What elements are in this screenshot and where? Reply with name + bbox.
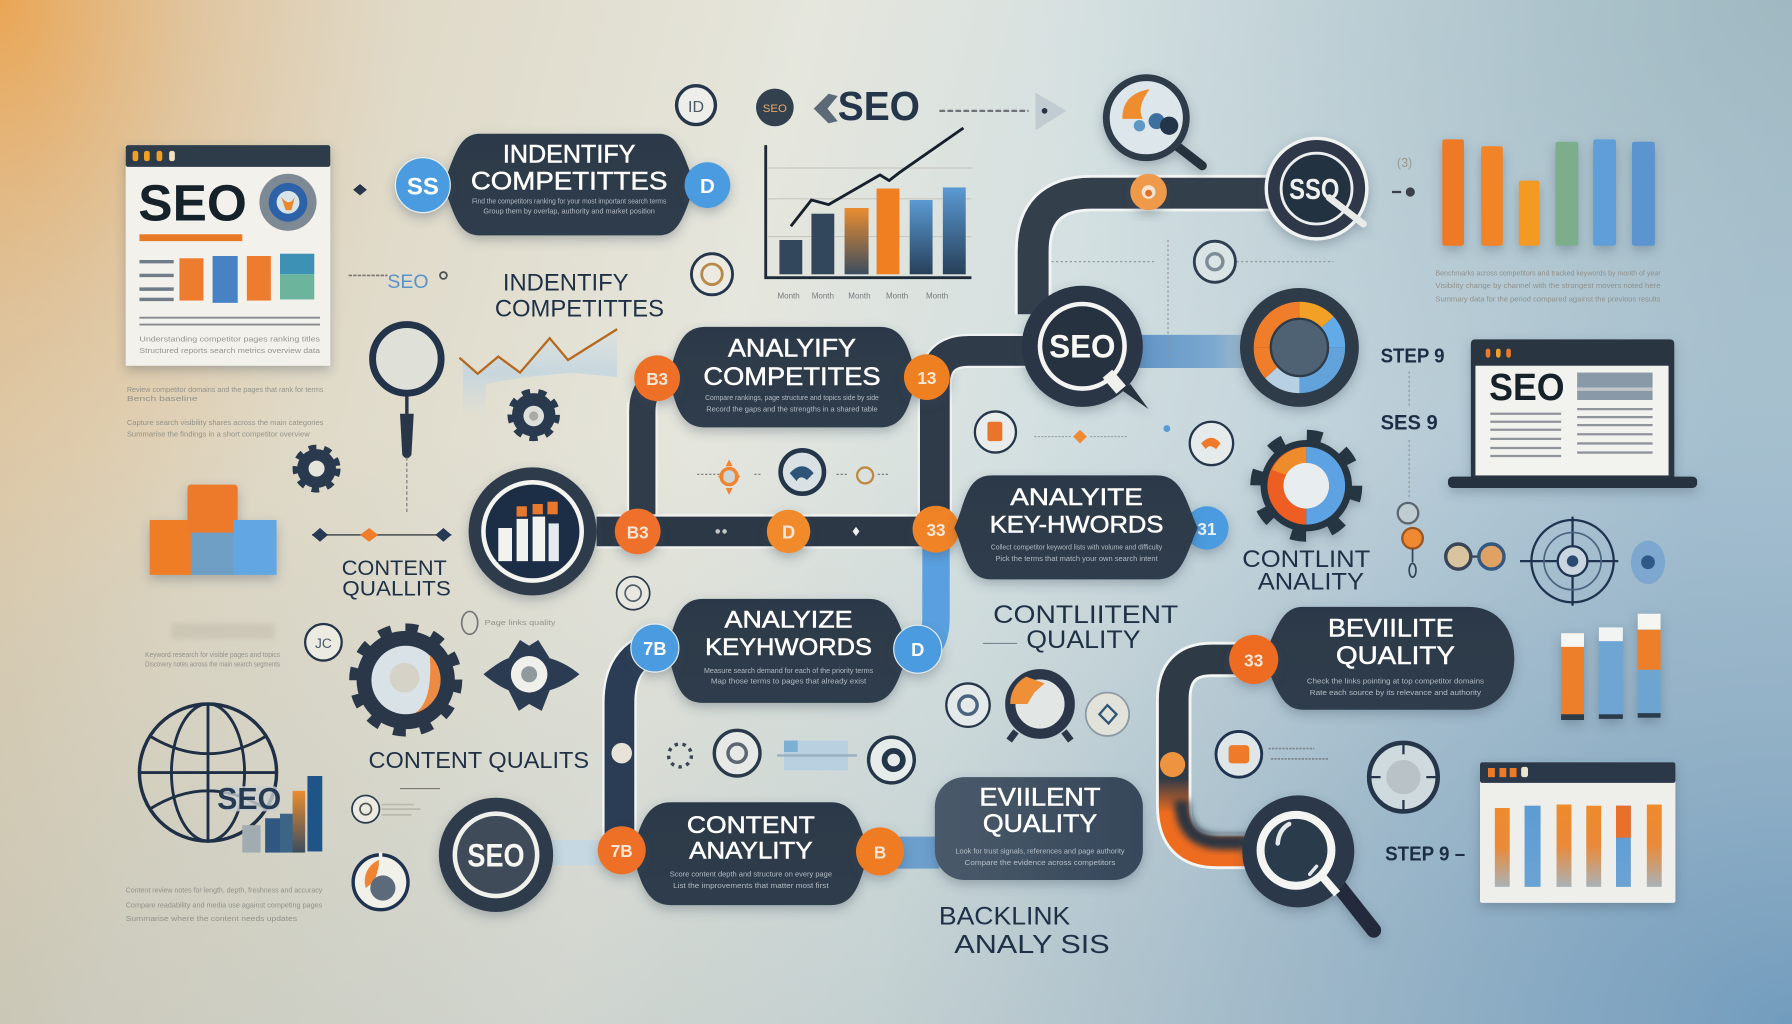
pill: analyze keywords 2: ANALYIZE xyxy=(725,606,853,633)
gear icon xyxy=(296,448,337,489)
target icons xyxy=(1446,517,1665,606)
pill: content analysis: ANAYLITY xyxy=(689,837,813,864)
pill: content analysis: CONTENT xyxy=(687,812,815,839)
label: SEO small xyxy=(349,271,447,293)
pill: evident quality xyxy=(935,777,1143,880)
bar and line chart xyxy=(766,128,971,300)
right caption text: Visibility change by channel with the strongest movers noted here xyxy=(1435,281,1661,290)
right caption text: Benchmarks across competitors and tracked keywords by month of year xyxy=(1435,268,1661,277)
pendant icon xyxy=(1398,503,1423,577)
small icons under donut xyxy=(975,411,1233,465)
web page mockup card: Understanding competitor pages ranking titles xyxy=(139,335,320,344)
pill: analyze keywords 2 xyxy=(666,599,909,703)
blue band between SEO circle and donut xyxy=(1131,335,1248,368)
step badges on main track: D xyxy=(782,521,795,542)
small link and line: Page links quality xyxy=(485,618,556,627)
backlink small icons xyxy=(1216,731,1438,811)
label: identify competitors xyxy=(495,269,664,323)
small link and line xyxy=(462,611,556,634)
circle icon: bars xyxy=(469,467,597,595)
label: content analysis right xyxy=(1242,546,1371,596)
circle icon: SEO bottom: SEO xyxy=(467,837,525,873)
pill: analyze keywords 2: KEYHWORDS xyxy=(705,634,872,661)
SEO circle top right: SSQ xyxy=(1289,174,1339,206)
pill: identify competitors: INDENTIFY xyxy=(503,140,636,168)
connector dot xyxy=(353,184,367,195)
left caption text 3: Summarise where the content needs updates xyxy=(126,914,297,923)
step badges: analyze competitors: 13 xyxy=(917,368,936,388)
timeline line xyxy=(312,528,451,542)
gauge icons row xyxy=(946,674,1129,741)
left caption text 1: Review competitor domains and the pages that rank for terms xyxy=(127,385,324,394)
pill: analyze competitors xyxy=(669,327,917,427)
step badges: analyze keywords xyxy=(631,624,942,673)
label: SEO small: SEO xyxy=(387,271,429,293)
large magnifier xyxy=(1242,795,1374,930)
label: step 9 bottom: STEP 9 – xyxy=(1385,843,1465,866)
bar and line chart: Month xyxy=(812,291,834,300)
step badges on main track: 33 xyxy=(926,520,946,540)
connector paths xyxy=(549,193,1274,853)
left caption text 1: Capture search visibility shares across the main categories xyxy=(127,418,324,427)
ring icon xyxy=(617,577,650,610)
track node backlink xyxy=(1160,752,1185,777)
pill: backlink quality: Rate each source by its relevance and authority xyxy=(1310,688,1481,697)
globe with chart xyxy=(139,704,322,853)
blurred keyword block: Discovery notes across the main search segments xyxy=(145,659,280,668)
label: identify competitors: COMPETITTES xyxy=(495,296,664,323)
SEO circle top right xyxy=(1266,138,1367,239)
step badges: analyze competitors xyxy=(634,354,950,401)
pill: analyze keywords 1: Pick the terms that match your own search intent xyxy=(995,554,1158,563)
pill: backlink quality: Check the links pointing at top competitor domains xyxy=(1307,676,1484,685)
pill: evident quality: QUALITY xyxy=(983,810,1097,838)
small marks on track xyxy=(715,527,859,536)
small icons by SEO heading: SEO xyxy=(763,103,787,115)
blocks xyxy=(150,485,277,575)
pill: analyze keywords 1: ANALYITE xyxy=(1010,484,1143,511)
step badges: content xyxy=(598,826,904,875)
small icons by SEO heading xyxy=(677,86,794,126)
label: identify competitors: INDENTIFY xyxy=(503,269,629,296)
pill: content analysis xyxy=(632,802,869,905)
color gear xyxy=(1257,437,1355,535)
labels: steps xyxy=(1381,344,1445,497)
right top bar chart xyxy=(1442,139,1655,246)
step badges on main track: B3 xyxy=(627,522,649,542)
pill: identify competitors xyxy=(443,134,695,235)
bar and line chart: Month xyxy=(777,291,800,300)
step badge: backlink xyxy=(1229,635,1278,684)
pill: analyze competitors: COMPETITES xyxy=(703,363,881,391)
step badges on main track xyxy=(615,506,1229,554)
step badges: content: 7B xyxy=(611,841,633,861)
arrow xyxy=(939,93,1066,130)
bar and line chart: Month xyxy=(848,291,871,300)
label: content analysis right: CONTLINT xyxy=(1242,546,1371,573)
second gear xyxy=(483,640,579,711)
label: content quality center xyxy=(983,601,1178,654)
pill: analyze keywords 2: Map those terms to pages that already exist xyxy=(711,676,866,685)
ring icon xyxy=(691,254,733,295)
eye icon xyxy=(1392,156,1415,197)
label: content analysis right: ANALITY xyxy=(1258,569,1364,596)
pill: content analysis: List the improvements that matter most first xyxy=(673,881,829,890)
bar and line chart: Month xyxy=(886,291,908,300)
step badges: identify: SS xyxy=(407,173,439,200)
labels: steps: STEP 9 xyxy=(1381,344,1445,367)
right small bar chart xyxy=(1561,614,1661,720)
label: backlink analysis: BACKLINK xyxy=(939,903,1071,931)
labels: steps: SES 9 xyxy=(1381,410,1438,435)
step badges: content: B xyxy=(874,842,886,862)
web page mockup card: SEO xyxy=(138,174,247,232)
donut chart xyxy=(1240,288,1359,407)
magnifier with handle xyxy=(373,325,441,512)
label: content quality center: QUALITY xyxy=(1026,626,1141,654)
large gear xyxy=(354,629,457,731)
label: content quality xyxy=(342,555,451,600)
dotted guide lines xyxy=(1051,240,1334,357)
left caption text 1: Bench baseline xyxy=(127,394,198,403)
pill: identify competitors: COMPETITTES xyxy=(471,168,667,196)
bar and line chart: Month xyxy=(926,291,948,300)
label: content quality single line: CONTENT QUALITS xyxy=(369,747,589,773)
node on left track xyxy=(611,743,632,763)
pill: content analysis: Score content depth and structure on every page xyxy=(670,870,832,879)
pill: analyze keywords 1: Collect competitor keyword lists with volume and difficulty xyxy=(991,543,1163,552)
label: content quality center: CONTLIITENT xyxy=(993,601,1178,629)
pill: identify competitors: Group them by overlap, authority and market position xyxy=(483,207,655,216)
label: backlink analysis xyxy=(939,903,1110,959)
right caption text xyxy=(1435,268,1661,304)
step badge: backlink: 33 xyxy=(1244,650,1263,670)
small gauge icon xyxy=(353,789,440,910)
pill: analyze keywords 1: KEY-HWORDS xyxy=(990,512,1163,539)
icon row under keywords xyxy=(669,730,914,783)
pill: analyze competitors: Compare rankings, page structure and topics side by side xyxy=(705,393,879,402)
mini icon row xyxy=(697,450,889,495)
circle icon: SEO bottom xyxy=(439,798,553,912)
gear icon xyxy=(511,392,557,438)
pill: backlink quality xyxy=(1263,607,1514,710)
pill: analyze keywords 1 xyxy=(954,475,1198,579)
circle icon: SEO magnifier xyxy=(1022,286,1149,409)
globe with chart: SEO xyxy=(217,781,281,816)
label: content quality: CONTENT xyxy=(342,555,447,580)
track node top xyxy=(1130,174,1167,210)
step badges: identify: D xyxy=(700,175,715,198)
left caption text 1 xyxy=(127,385,324,439)
laptop with SEO page: SEO xyxy=(1489,366,1565,408)
magnifier top xyxy=(1106,78,1202,166)
eye icon: (3) xyxy=(1397,156,1412,170)
icon: small ring: JC xyxy=(315,636,332,651)
pill: analyze competitors: ANALYIFY xyxy=(728,335,856,363)
right caption text: Summary data for the period compared against the previous results xyxy=(1435,295,1661,304)
left caption text 3: Content review notes for length, depth, freshness and accuracy xyxy=(126,886,323,895)
blurred keyword block xyxy=(145,623,280,668)
web page mockup card xyxy=(126,145,330,366)
small icon with line xyxy=(352,795,421,823)
step badges on main track: 31 xyxy=(1197,519,1217,539)
window chart bottom right xyxy=(1480,762,1675,903)
circle icon: SEO magnifier: SEO xyxy=(1049,329,1115,365)
pill: identify competitors: Find the competitors ranking for your most important search terms xyxy=(472,196,667,205)
heading: SEO: SEO xyxy=(838,83,920,129)
pill: evident quality: Look for trust signals, references and page authority xyxy=(955,847,1125,856)
label: backlink analysis: ANALY SIS xyxy=(954,929,1110,959)
trend line xyxy=(459,329,617,417)
blurred keyword block: Keyword research for visible pages and topics xyxy=(145,650,280,659)
pill: analyze keywords 2: Measure search demand for each of the priority terms xyxy=(704,666,873,675)
pill: backlink quality: BEVIILITE xyxy=(1328,615,1454,643)
left caption text 3 xyxy=(126,886,323,923)
step badges: analyze keywords: 7B xyxy=(643,638,667,659)
left caption text 3: Compare readability and media use against competing pages xyxy=(126,900,323,909)
step badges: analyze keywords: D xyxy=(911,639,924,660)
pill: analyze competitors: Record the gaps and the strengths in a shared table xyxy=(706,404,878,413)
small icons by SEO heading: ID xyxy=(688,99,704,116)
pill: evident quality: Compare the evidence across competitors xyxy=(965,858,1116,867)
pill: backlink quality: QUALITY xyxy=(1336,642,1455,670)
laptop with SEO page xyxy=(1448,339,1697,488)
pill: evident quality: EVIILENT xyxy=(979,784,1101,812)
step badges: analyze competitors: B3 xyxy=(646,369,668,389)
icon: small ring xyxy=(305,624,342,661)
left caption text 1: Summarise the findings in a short competitor overview xyxy=(127,430,310,439)
step badges: identify xyxy=(395,158,730,213)
label: content quality: QUALLITS xyxy=(342,575,451,600)
web page mockup card: Structured reports search metrics overview data xyxy=(139,346,321,355)
